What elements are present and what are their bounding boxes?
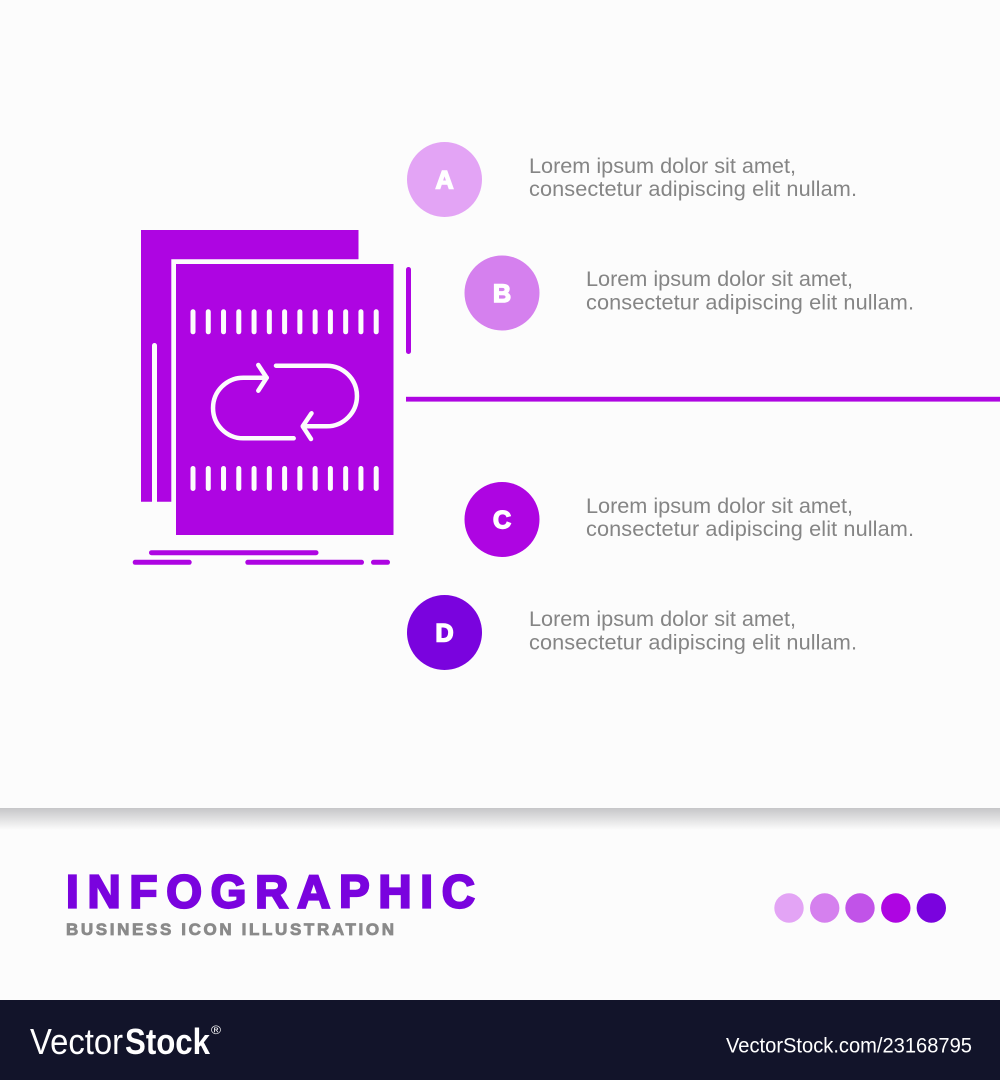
badge B <box>464 256 540 330</box>
shadow band <box>0 808 1000 830</box>
legend dots <box>774 893 946 923</box>
text C: Lorem ipsum dolor sit amet, <box>586 493 853 518</box>
footer bar <box>0 1000 1000 1080</box>
text B: consectetur adipiscing elit nullam. <box>586 290 914 314</box>
footer URL: VectorStock.com/23168795 <box>726 1035 972 1058</box>
exchange loop arrows <box>213 365 357 439</box>
footer logo: Vector <box>30 1021 123 1062</box>
item B <box>464 256 914 330</box>
text B: Lorem ipsum dolor sit amet, <box>586 266 853 291</box>
icon: documents with exchange arrows <box>135 230 393 562</box>
title: INFOGRAPHIC <box>66 866 475 918</box>
item C <box>464 482 914 557</box>
badge C: C <box>493 506 511 534</box>
back document sheet <box>141 230 358 502</box>
item D <box>407 595 857 670</box>
badge C <box>464 482 540 557</box>
text C: consectetur adipiscing elit nullam. <box>586 516 914 541</box>
text D: consectetur adipiscing elit nullam. <box>529 630 857 654</box>
footer logo: ® <box>211 1023 221 1037</box>
footer logo: Stock <box>125 1021 211 1062</box>
bottom row of ticks <box>193 468 376 488</box>
text A: Lorem ipsum dolor sit amet, <box>529 153 796 178</box>
badge D <box>407 595 482 670</box>
text A: consectetur adipiscing elit nullam. <box>529 176 857 201</box>
badge D: D <box>435 620 454 648</box>
top row of ticks <box>193 312 376 332</box>
subtitle: BUSINESS ICON ILLUSTRATION <box>66 920 394 939</box>
text D: Lorem ipsum dolor sit amet, <box>529 606 796 631</box>
ground lines <box>135 553 388 562</box>
badge B: B <box>493 280 511 308</box>
back sheet white stripe <box>152 346 157 503</box>
badge A: A <box>435 166 454 194</box>
badge A <box>407 142 482 217</box>
item A <box>407 142 857 217</box>
front document sheet <box>176 264 394 535</box>
vertical accent bar <box>406 270 411 352</box>
horizontal divider line <box>406 397 1000 402</box>
